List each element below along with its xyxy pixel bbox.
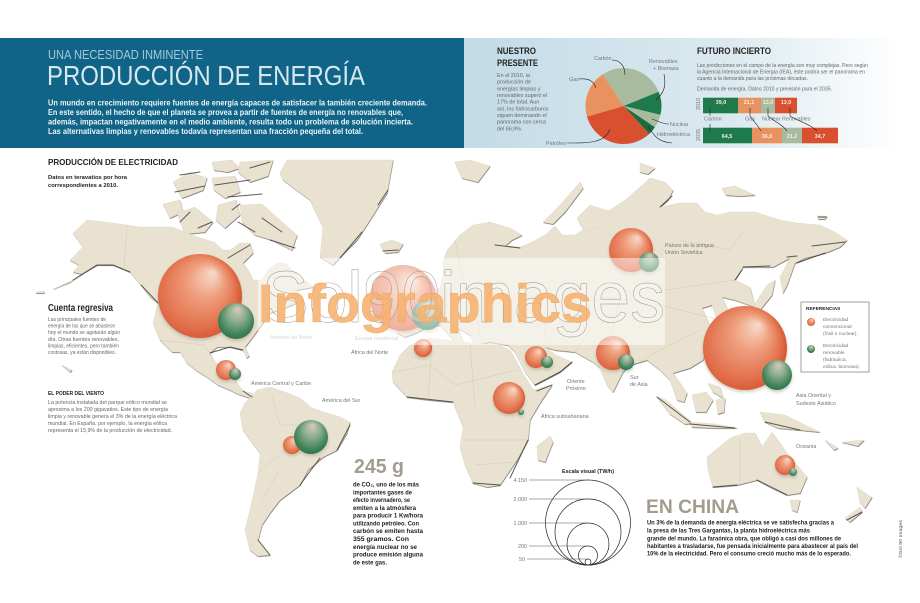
legend: referencias: eólica, biomasa). [823, 364, 860, 370]
legend: referencias: Electricidad [823, 317, 849, 323]
text block: cuenta regresiva: Cuenta regresiva [48, 303, 113, 314]
pie labels: Petróleo [546, 141, 566, 147]
callout: 245 g: 245 g [354, 456, 404, 478]
bar chart: 2010 and 2035: Renovables [782, 116, 811, 122]
kicker: UNA NECESIDAD INMINENTE [48, 48, 203, 62]
section heading: producción de electricidad [48, 158, 178, 189]
region labels: América Central y Caribe [251, 381, 311, 387]
legend: referencias: Electricidad [823, 343, 849, 349]
sphere: Sur de Asia [596, 336, 634, 370]
legend: referencias: (fósil o nuclear). [823, 331, 858, 337]
callout: 245 g: produce emisión alguna [353, 552, 423, 559]
intro text: En este sentido, el hecho de que el planeta se provea a partir de fuentes de energía no renovables que, [48, 108, 403, 117]
text block: en China: 10% de la electricidad. Pero el consumo creció mucho más de lo esperado. [647, 550, 851, 557]
bar chart: 2010 and 2035: Gas [745, 116, 755, 122]
credit: ©Sol 90 Images [897, 519, 904, 558]
text block: el poder del viento: EL PODER DEL VIENTO [48, 391, 105, 397]
text block: el poder del viento: La potencia instalada del parque eólico mundial se [48, 400, 167, 406]
body text: producción de [497, 80, 531, 86]
text block: cuenta regresiva [48, 303, 120, 356]
bar chart: 2010 and 2035: 2035 [696, 129, 702, 141]
bar chart: 2010 and 2035: Nuclear [762, 116, 781, 122]
pie labels: Renovables [649, 59, 678, 65]
text block: en China: la presa de las Tres Gargantas, la planta hidroeléctrica más [647, 528, 810, 535]
watermark: Infographics [258, 274, 592, 334]
callout: 245 g: para producir 1 Kw/hora [353, 513, 423, 520]
heading: FUTURO INCIERTO [697, 46, 771, 56]
region labels: Próximo [566, 386, 586, 392]
text block: cuenta regresiva: hoy el mundo se agotarán algún [48, 330, 120, 336]
region labels: Sudeste Asiático [796, 401, 836, 407]
body text: cuanto a la demanda para las próximas décadas. [697, 76, 808, 82]
pie labels [546, 56, 690, 147]
callout: 245 g: utilizando petróleo. Con [353, 520, 419, 527]
bar chart: 2010 and 2035: 13,0 [781, 100, 791, 106]
world map [36, 160, 872, 556]
pie labels: Hidroeléctrica [657, 132, 690, 138]
text block: cuenta regresiva: día. Otras fuentes renovables, [48, 337, 119, 343]
callout: 245 g: emiten a la atmósfera [353, 505, 416, 512]
legend: referencias [801, 302, 869, 372]
region labels: África del Norte [351, 349, 388, 356]
pie labels: + Biomasa [653, 66, 679, 72]
coast shading [73, 162, 862, 555]
region labels: América del Sur [322, 398, 361, 404]
legend: referencias: convencional [823, 324, 852, 330]
country borders [124, 225, 745, 500]
body text: Las predicciones en el campo de la energía son muy complejas. Pero según [697, 63, 868, 69]
header panel: title [0, 38, 464, 148]
bar chart: 2010 and 2035: 21,1 [744, 100, 754, 106]
visual scale: Escala visual (TW/h) [562, 469, 614, 475]
visual scale: 200 [518, 544, 527, 550]
text block: en China [646, 496, 858, 557]
bar chart: 2010 and 2035: 2010 [696, 98, 702, 110]
pie labels: Gas [569, 77, 579, 83]
watermark: Sol90images [262, 258, 665, 338]
callout: 245 g: de este gas. [353, 559, 387, 566]
region labels: Sur [630, 375, 639, 381]
body text: del 66,9%. [497, 126, 522, 132]
legend: referencias: renovable [823, 350, 845, 356]
callout: 245 g: energía nuclear no se [353, 544, 417, 551]
body text: En el 2010, la [497, 73, 530, 79]
body text: renovables superó el [497, 93, 547, 99]
text block: cuenta regresiva: Las principales fuentes de [48, 317, 106, 323]
bar chart: 2010 and 2035: 34,7 [815, 134, 825, 140]
visual scale: 1.000 [514, 521, 527, 527]
body text: energías limpias y [497, 86, 541, 92]
region labels: Oceanía [796, 444, 816, 450]
intro text: Un mundo en crecimiento requiere fuentes de energía capaces de satisfacer la también creciente demanda. [48, 98, 427, 108]
sphere: África del Norte [414, 339, 432, 357]
sphere: América Central y Caribe [216, 360, 241, 380]
region labels: Asia Oriental y [796, 393, 831, 399]
sphere: Asia Oriental [703, 306, 792, 390]
pie leaders [567, 60, 672, 143]
bar chart: 2010 and 2035: 21,2 [787, 134, 797, 140]
region labels: de Asia [630, 382, 648, 388]
bar chart: 2010 and 2035: 64,5 [722, 134, 732, 140]
callout: 245 g: carbón se emiten hasta [353, 528, 423, 535]
visual scale: 50 [519, 557, 525, 563]
body text: panorama con cerca [497, 120, 546, 126]
sphere: África subsahariana [493, 382, 525, 415]
text block: cuenta regresiva: costosas, ya están disponibles. [48, 350, 116, 356]
bar chart: 2010 and 2035: Carbón [704, 116, 722, 122]
text block: en China: habitantes a trasladarse, fue pensada inicialmente para abastecer al país del [647, 543, 858, 550]
section heading: producción de electricidad: PRODUCCIÓN DE ELECTRICIDAD [48, 158, 178, 167]
bar chart: 2010 and 2035: 39,0 [716, 100, 726, 106]
intro text: además, impactan negativamente en el medio ambiente, resulta todo un problema de solución incierta. [48, 118, 413, 126]
region labels: América de Norte [270, 335, 312, 341]
visual scale [514, 469, 630, 565]
pie chart [586, 68, 661, 144]
continents [36, 160, 872, 556]
intro text [48, 98, 427, 136]
text block: cuenta regresiva: energía de las que se abastece [48, 324, 115, 330]
visual scale: 2.000 [514, 497, 527, 503]
sphere: Europa occidental [370, 265, 442, 331]
main title: PRODUCCIÓN DE ENERGÍA [47, 60, 365, 91]
pie labels: Carbón [594, 56, 612, 62]
region labels: Países de la antigua [665, 243, 714, 249]
text block: el poder del viento: aproxima a los 200 gigavatios. Este tipo de energía [48, 407, 168, 413]
legend: referencias: REFERENCIAS [806, 306, 841, 312]
sphere: Oriente Próximo [525, 346, 553, 368]
region labels: Unión Soviética [665, 250, 702, 256]
bar chart: 2010 and 2035: 13,0 [763, 100, 773, 106]
body text [497, 73, 549, 132]
intro text: Las alternativas limpias y renovables todavía representan una fracción pequeña del total. [48, 127, 363, 136]
text block: cuenta regresiva: limpias, eficientes, pero también [48, 343, 119, 349]
region labels: África subsahariana [541, 413, 589, 420]
callout: 245 g: 355 gramos. Con [353, 536, 409, 543]
heading: NUESTRO [497, 46, 536, 56]
body text [697, 63, 868, 92]
sphere: antigua Unión Soviética [609, 228, 659, 272]
text block: el poder del viento: representa el 15,9% de la producción de electricidad. [48, 428, 172, 434]
text block: el poder del viento: limpia y renovable genera el 3% de la energía eléctrica [48, 414, 177, 420]
text block: en China: grande del mundo. La faraónica obra, que obligó a casi dos millones de [647, 535, 841, 542]
text block: en China: Un 3% de la demanda de energía eléctrica se ve satisfecha gracias a [647, 520, 834, 527]
header panel: light background [464, 38, 900, 148]
callout: 245 g [353, 456, 423, 566]
pie labels: Nuclear [670, 122, 689, 128]
panel: nuestro presente: PRESENTE [497, 58, 538, 68]
panel: nuestro presente [497, 46, 690, 147]
sphere: América de Norte [158, 254, 254, 339]
body text: así, los hidrocarburos [497, 106, 549, 112]
callout: 245 g: importantes gases de [353, 489, 412, 496]
body text: 17% de total. Aun [497, 100, 539, 106]
body text: Demanda de energía. Datos 2010 y previsión para el 2035. [697, 86, 832, 92]
panel: futuro incierto [696, 46, 868, 143]
text block: el poder del viento [48, 391, 177, 434]
region labels: Europa occidental [355, 336, 398, 342]
body text: siguen dominando el [497, 113, 547, 119]
visual scale: 4.150 [514, 478, 527, 484]
bar chart: 2010 and 2035: 36,0 [762, 134, 772, 140]
section heading: producción de electricidad: correspondientes a 2010. [48, 183, 118, 189]
callout: 245 g: de CO₂, uno de los más [353, 482, 419, 488]
text block: en China: EN CHINA [646, 496, 739, 518]
callout: 245 g: efecto invernadero, se [353, 497, 410, 504]
bar chart: 2010 and 2035 [696, 98, 838, 143]
region labels [251, 243, 836, 450]
section heading: producción de electricidad: Datos en teravatios por hora [48, 175, 128, 181]
body text: la Agencia Internacional de Energía (IEA), éste podría ser el panorama en [697, 70, 865, 76]
sphere: Oceanía [775, 455, 797, 476]
text block: el poder del viento: mundial. En España, por ejemplo, la energía eólica [48, 421, 167, 427]
region labels: Oriente [567, 379, 585, 385]
sphere: América del Sur [283, 420, 328, 454]
legend: referencias: (hidráulica, [823, 357, 847, 363]
